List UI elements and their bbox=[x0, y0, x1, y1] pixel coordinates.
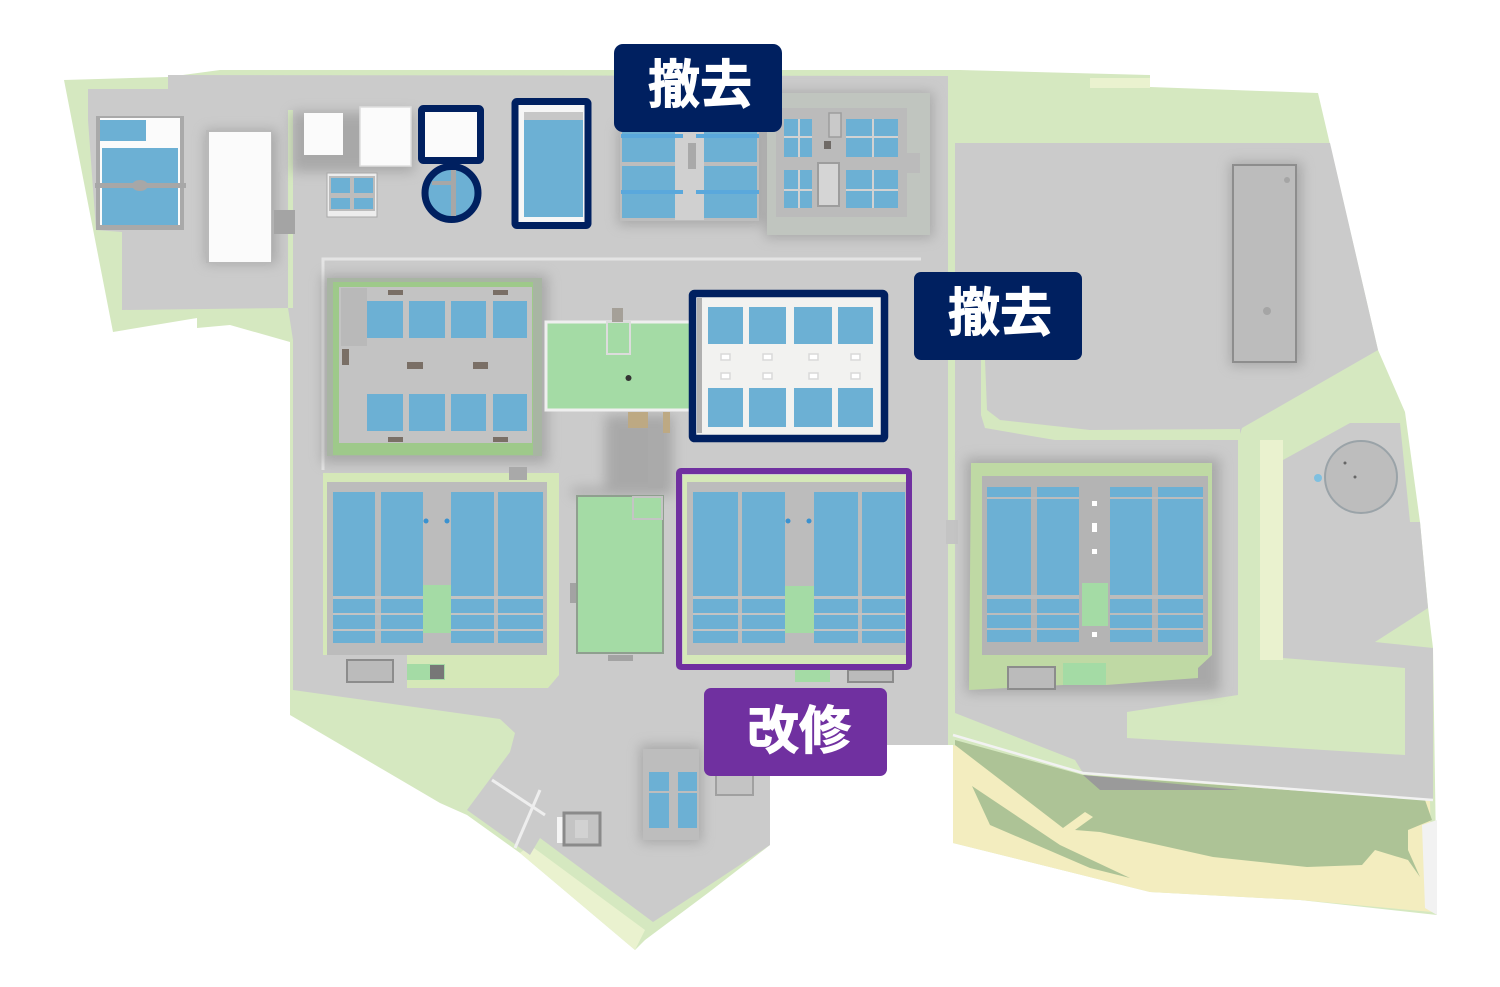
removal: basin with white roof bbox=[692, 294, 884, 438]
label: removal right bbox=[914, 272, 1082, 360]
road edge lines bbox=[953, 735, 1433, 800]
building: small white roofs bbox=[304, 107, 411, 166]
removal: white square bbox=[422, 108, 480, 160]
green roof center bbox=[546, 308, 691, 410]
label: removal top bbox=[614, 44, 782, 132]
building: top right basins bbox=[767, 93, 930, 235]
building: south basin bbox=[643, 749, 753, 840]
building: small south square bbox=[557, 813, 600, 845]
south paths bbox=[492, 780, 545, 848]
building: long east roof bbox=[1233, 165, 1296, 362]
building: small tank bbox=[327, 173, 377, 217]
building: upper middle-left basin bbox=[327, 278, 542, 456]
renovation outline bbox=[679, 471, 909, 667]
green kerb west bbox=[288, 110, 293, 308]
building: renovation basin bbox=[679, 471, 909, 682]
main paved ground bbox=[88, 75, 948, 922]
building: lower left basin bbox=[323, 467, 559, 688]
green kerb east bbox=[981, 360, 1240, 440]
soft shadows bbox=[205, 92, 1302, 843]
green roof lower center bbox=[570, 496, 663, 661]
road crossing bbox=[946, 520, 958, 544]
building: white roof bbox=[206, 130, 295, 263]
east paved ground bbox=[955, 143, 1433, 800]
dome tank bbox=[1314, 441, 1397, 513]
label: renovation bbox=[704, 688, 887, 776]
building: upper left tank bbox=[95, 116, 186, 230]
label: renovation: 改修 bbox=[747, 703, 851, 761]
stairs bbox=[628, 412, 670, 488]
building: top center basins bbox=[620, 128, 759, 221]
label: removal right: 撤去 bbox=[948, 285, 1052, 343]
moss slope bbox=[955, 740, 1432, 878]
yellow slope bbox=[953, 745, 1432, 912]
building: lower right basin bbox=[969, 463, 1212, 690]
removal: rectangular tank bbox=[515, 102, 588, 226]
white retaining edge bbox=[1422, 820, 1437, 915]
removal: circular tank bbox=[425, 166, 478, 220]
compound line bbox=[323, 259, 921, 470]
label: removal top: 撤去 bbox=[648, 57, 752, 115]
pale strips on green bbox=[520, 78, 1283, 950]
